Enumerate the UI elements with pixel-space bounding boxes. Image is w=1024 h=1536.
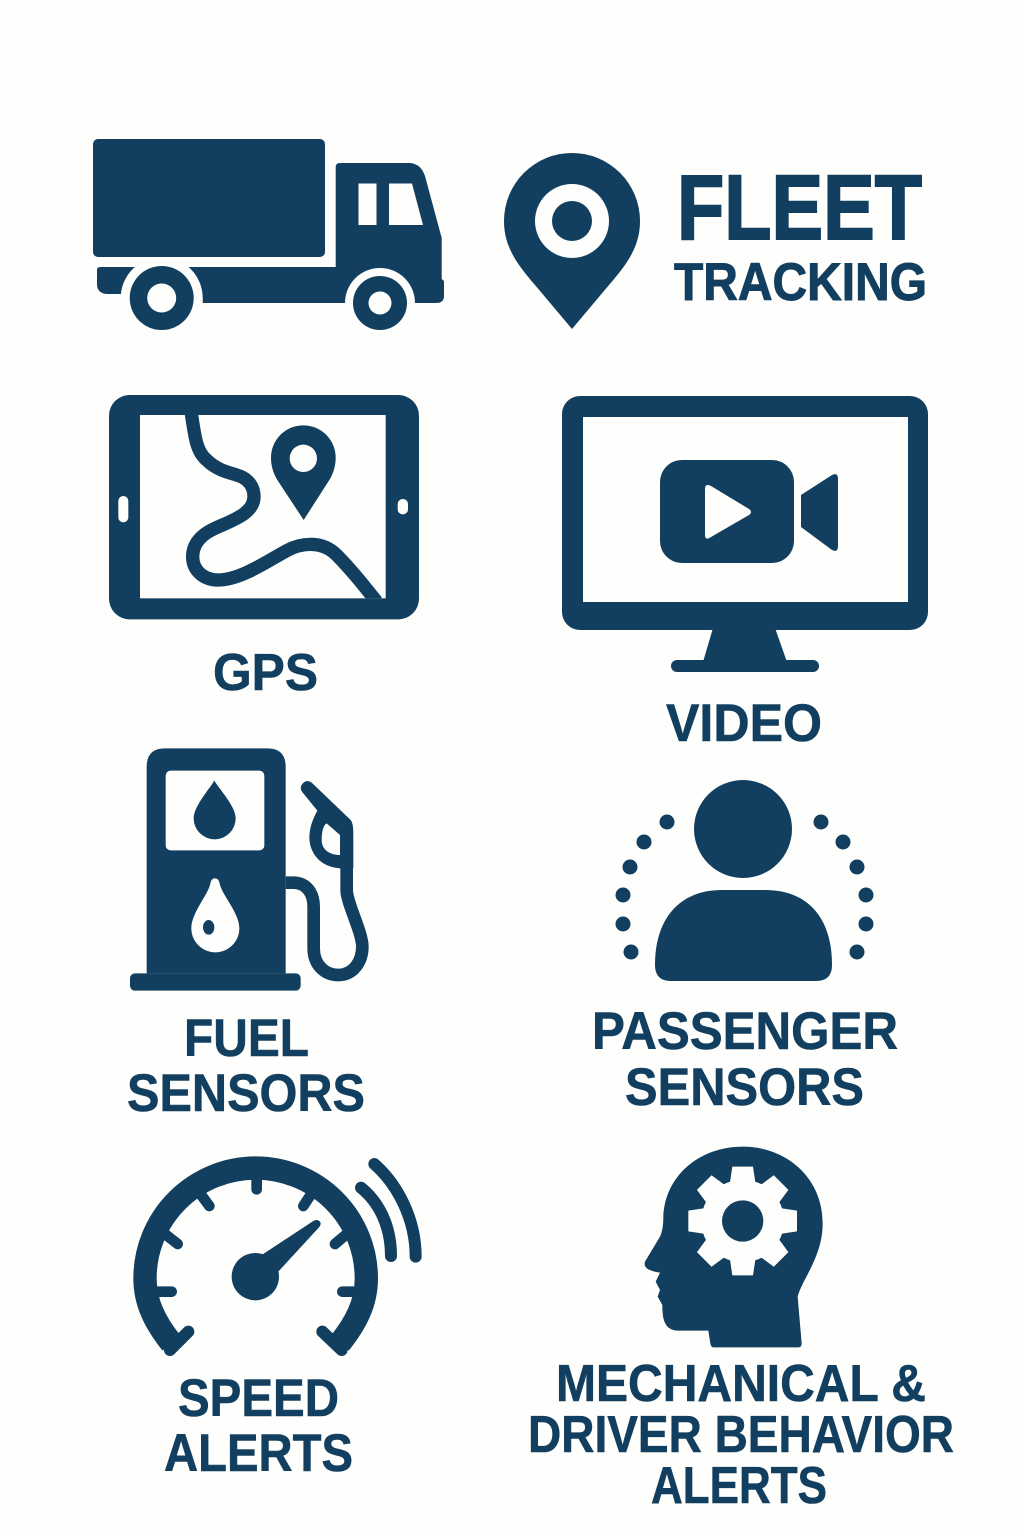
label: fuel sensors	[127, 1009, 365, 1123]
label: passenger sensors: SENSORS	[625, 1058, 864, 1117]
label: mechanical and driver behavior alerts: ALERTS	[651, 1457, 827, 1515]
label: mechanical and driver behavior alerts	[528, 1355, 954, 1515]
label: speed alerts: ALERTS	[164, 1424, 353, 1483]
icon: speedometer	[145, 1164, 416, 1350]
label: speed alerts: SPEED	[178, 1369, 339, 1428]
icon: fuel pump	[130, 748, 362, 991]
label: fuel sensors: SENSORS	[127, 1064, 365, 1123]
icon: passenger sensor	[616, 780, 874, 981]
title: fleet tracking	[674, 157, 927, 312]
label: passenger sensors	[592, 1002, 898, 1117]
label: speed alerts	[164, 1369, 353, 1483]
infographic: fleet tracking	[93, 139, 954, 1504]
label: GPS: GPS	[213, 644, 318, 702]
icon: video monitor	[562, 396, 928, 672]
icon: head with gear	[645, 1147, 823, 1347]
title: fleet tracking: TRACKING	[674, 253, 927, 312]
label: mechanical and driver behavior alerts: DRIVER BEHAVIOR	[528, 1406, 954, 1464]
icon: delivery truck	[93, 139, 444, 339]
label: video: VIDEO	[666, 694, 822, 753]
label: passenger sensors: PASSENGER	[592, 1002, 898, 1061]
icon: location pin	[504, 153, 640, 329]
title: fleet tracking: FLEET	[677, 157, 922, 259]
label: mechanical and driver behavior alerts: MECHANICAL &	[556, 1355, 926, 1413]
icon: GPS tablet with map	[109, 395, 419, 619]
label: fuel sensors: FUEL	[184, 1009, 309, 1068]
